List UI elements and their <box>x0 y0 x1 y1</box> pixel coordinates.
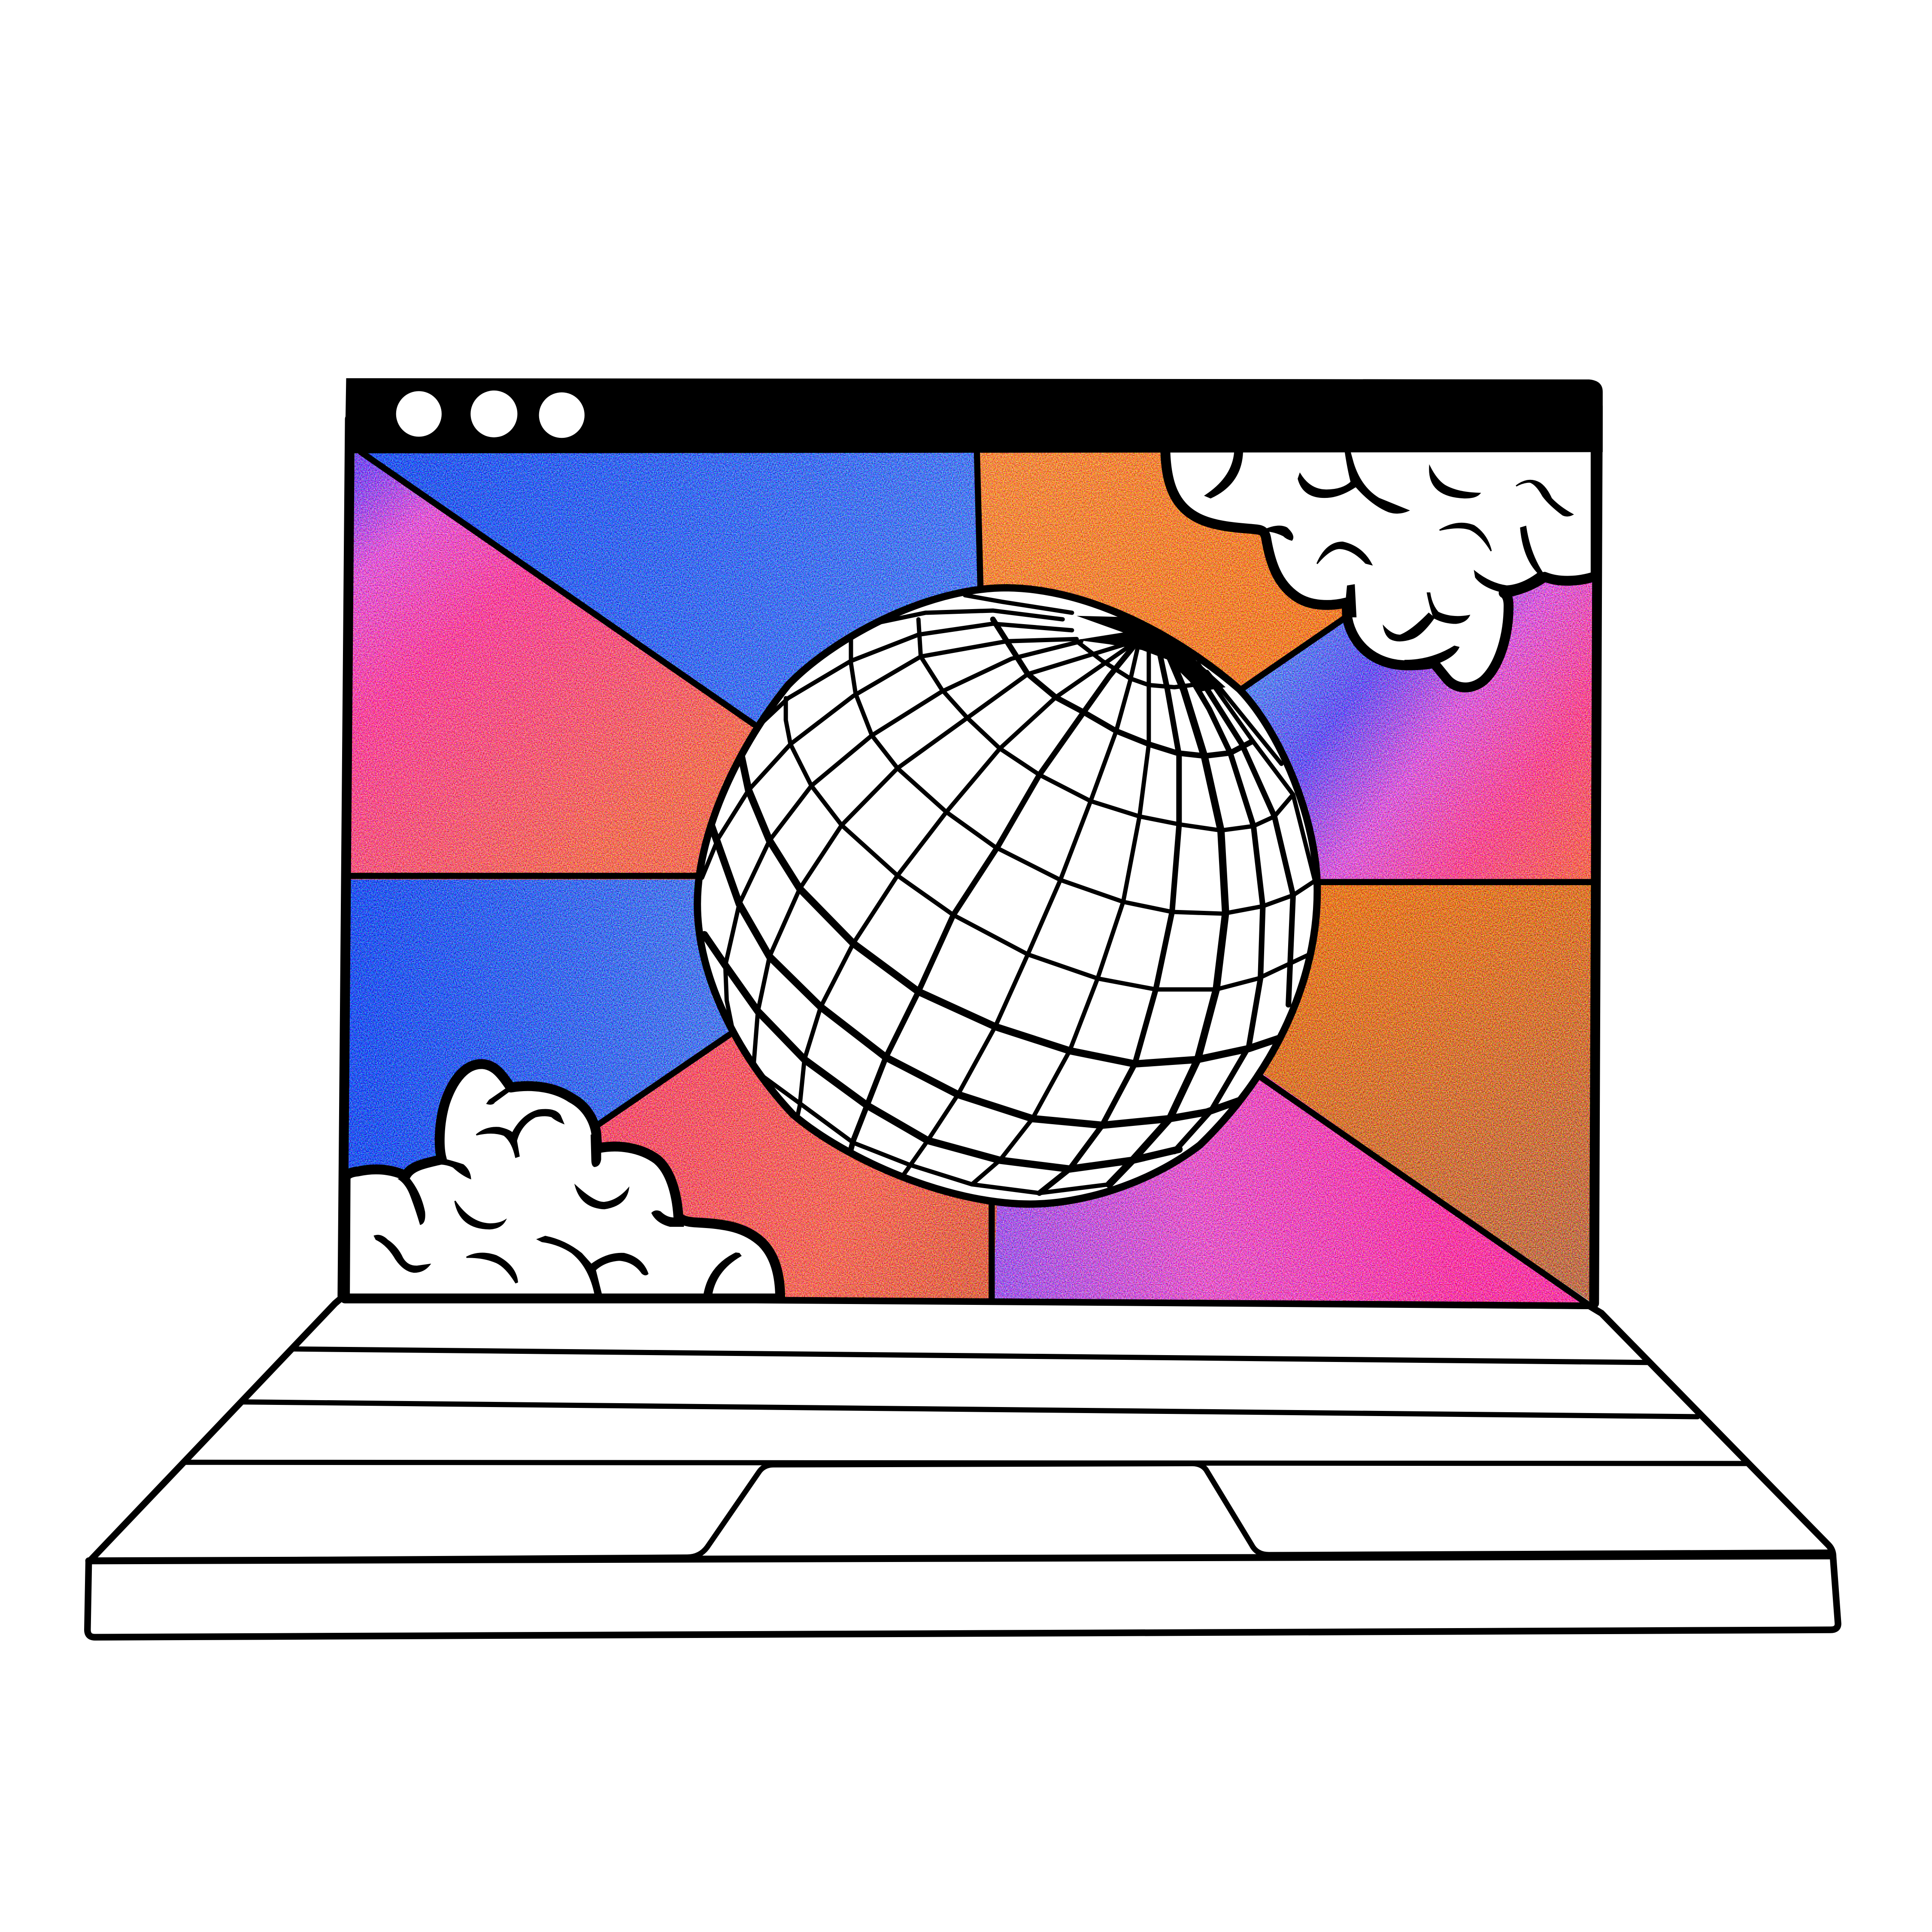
screen colour panels <box>343 451 1597 1306</box>
base outline <box>88 1296 1838 1637</box>
globe outline <box>698 588 1317 1204</box>
window dot three <box>539 392 585 438</box>
panel: left blue <box>343 876 739 1294</box>
parallels <box>704 619 1316 1193</box>
keyboard row lines <box>184 1349 1747 1464</box>
cloud outline <box>345 1064 780 1298</box>
globe fill <box>698 588 1317 1204</box>
trackpad <box>89 1464 1829 1561</box>
window title bar <box>345 378 1603 453</box>
cloud: top right <box>1165 437 1595 687</box>
panel: top orange <box>977 451 1355 702</box>
panel: right rainbow <box>1232 542 1597 883</box>
cloud outline <box>1165 437 1595 687</box>
trackpad bottom edge <box>89 1556 1831 1561</box>
cloud curls <box>1205 449 1573 665</box>
meridians <box>702 595 1316 1193</box>
globe grid <box>702 595 1316 1193</box>
panel divider spokes <box>350 452 1594 1303</box>
panel: bottom pink <box>989 1069 1592 1306</box>
screen side borders <box>343 406 1598 1303</box>
panel: top left blue <box>355 451 986 739</box>
globe pole mass <box>1077 616 1225 692</box>
panel: left pink <box>345 451 764 880</box>
laptop screen frame and window bar <box>343 378 1603 1306</box>
cloud curls <box>374 1087 741 1297</box>
panel: bottom salmon <box>579 1030 998 1301</box>
cloud: bottom left <box>345 1064 780 1298</box>
screen bottom edge <box>344 1297 1589 1306</box>
panel: lower right orange <box>1244 881 1597 1306</box>
window dot two <box>470 391 517 437</box>
window dot one <box>396 391 442 437</box>
laptop keyboard base <box>88 1296 1838 1637</box>
globe <box>698 588 1317 1204</box>
